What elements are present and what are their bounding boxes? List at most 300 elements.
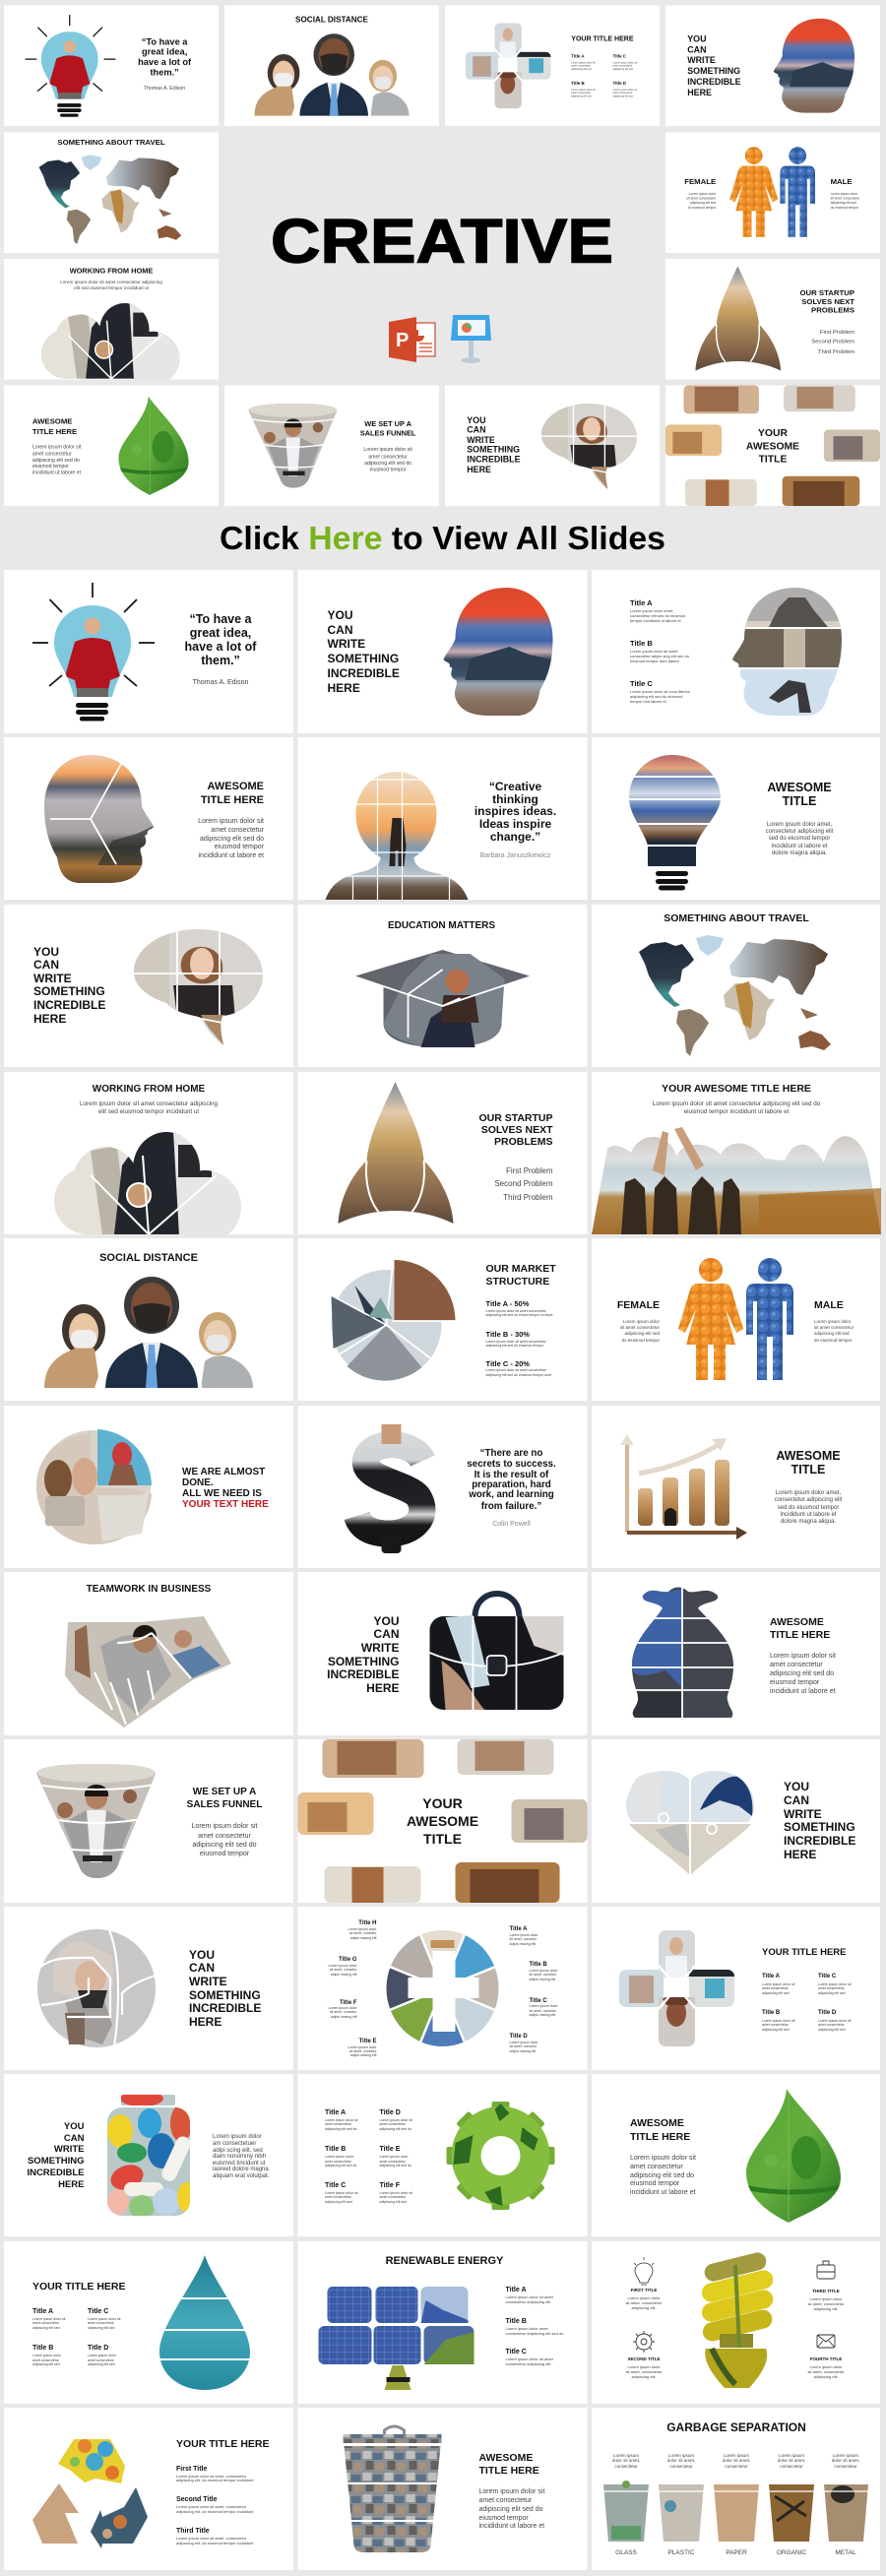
- heading: YOU: [687, 33, 706, 43]
- medical cross photo: [466, 23, 551, 108]
- panel: garbage separation: [592, 2408, 880, 2570]
- heading: YOUR TITLE HERE: [176, 2438, 270, 2450]
- left titles: Title E: [359, 2039, 376, 2044]
- five text columns: consectetur: [725, 2464, 748, 2469]
- money bag photo: [629, 1587, 737, 1720]
- panel: water drop: [4, 2241, 293, 2404]
- handshake photo: [65, 1616, 231, 1728]
- four text items: adipiscing elit sed: [88, 2326, 115, 2330]
- four text items: Title B: [762, 2010, 781, 2016]
- quote: thinking: [492, 792, 538, 806]
- four text items: Title C: [818, 1974, 837, 1979]
- six text items: amet consectetur: [380, 2122, 407, 2126]
- left titles: adipis mssing elit: [350, 1936, 377, 1940]
- three text items: [630, 598, 691, 704]
- heading: HERE: [189, 2015, 222, 2029]
- panel: top thumbnail female male: [665, 132, 880, 253]
- heading: HERE: [58, 2179, 85, 2190]
- three legend items: Lorem ipsum dolor sit amet consectetur: [486, 1340, 547, 1344]
- five text columns: Lorem ipsum: [833, 2453, 858, 2458]
- heading: SOMETHING: [467, 444, 520, 454]
- title: creative: CREATIVE: [271, 207, 613, 276]
- heading: WRITE: [784, 1807, 822, 1821]
- five text columns: dolor sit amet,: [778, 2458, 805, 2463]
- lorem: incididunt ut labore et: [780, 1512, 837, 1518]
- quote: It is the result of: [475, 1470, 549, 1480]
- four text items: adipiscing elit sed: [818, 1991, 846, 1995]
- four text items: amet consectetur: [32, 2358, 60, 2362]
- lorem: incididunt ut labore et: [198, 852, 264, 859]
- heading: INCREDIBLE: [189, 2001, 261, 2015]
- first title: Lorem ipsum dolor: [627, 2295, 661, 2300]
- quote: “To have a: [190, 612, 253, 626]
- heading: SOMETHING: [687, 66, 740, 76]
- three text items: Lorem ipsum dolor sit amet: [506, 2356, 554, 2361]
- male column: MALE: [831, 177, 853, 186]
- quote: preparation, hard: [472, 1479, 551, 1490]
- four text items: adipiscing elit sed: [613, 94, 634, 97]
- three text items: Lorem ipsum dolor sit amet, consectetur: [176, 2536, 247, 2541]
- panel: collage title: [297, 1739, 587, 1903]
- icon: gear outline: [633, 2331, 655, 2353]
- three legend items: Title A - 50%: [486, 1299, 530, 1308]
- problems list: First Problem: [506, 1166, 553, 1175]
- four text items: amet consectetur: [88, 2358, 115, 2362]
- lorem: adipiscing elit sed do: [193, 1842, 257, 1849]
- lorem: Lorem ipsum dolor sit amet consectetur adipiscing: [60, 280, 162, 284]
- panel: top thumbnail quote: [4, 6, 219, 126]
- first title: sit amet, consectetur: [626, 2300, 663, 2305]
- male column: adipiscing elit sed: [831, 201, 856, 205]
- lorem: amet consectetur: [198, 1833, 252, 1840]
- panel: rocket: [297, 1072, 587, 1234]
- three legend items: Title B - 30%: [486, 1330, 530, 1339]
- quote: them.”: [201, 654, 240, 667]
- four text items: Lorem ipsum dolor sit: [762, 1982, 794, 1986]
- rocket photo: [335, 1080, 457, 1225]
- six text items: adipiscing elit sed do: [380, 2164, 411, 2168]
- right titles: adipis mssing elit: [530, 1978, 555, 1981]
- rocket photo: [693, 265, 784, 372]
- four text items: amet consectetur: [762, 2023, 790, 2027]
- quote: have a lot of: [138, 57, 192, 67]
- heading: TEAMWORK IN BUSINESS: [87, 1584, 212, 1595]
- female column: Lorem ipsum dolor: [689, 192, 717, 196]
- six text items: adipiscing elit sed: [380, 2200, 407, 2204]
- lorem: Lorem ipsum dolor sit: [32, 445, 82, 451]
- panel: almost done: [4, 1406, 293, 1568]
- heading: TITLE: [791, 1463, 825, 1476]
- lorem: laoreet dolore magna: [213, 2167, 269, 2172]
- panel: growth chart: [592, 1406, 880, 1568]
- lorem: adipiscing elit sed do: [364, 461, 411, 467]
- lorem: eiusmod tempor: [770, 1679, 820, 1686]
- four text items: amet consectetur: [571, 91, 591, 94]
- lorem: incididunt ut labore et: [478, 2523, 544, 2530]
- third title: THIRD TITLE: [812, 2289, 840, 2293]
- panel: heart: [592, 1739, 880, 1903]
- right titles: adipis mssing elit: [530, 2013, 555, 2017]
- four text items: Title D: [613, 81, 626, 86]
- panel: head puzzle: [4, 737, 293, 900]
- heading: CAN: [467, 424, 485, 434]
- lorem: Lorem ipsum dolor sit: [770, 1653, 836, 1660]
- six text items: amet consectetur: [380, 2195, 407, 2199]
- male column: [814, 1299, 854, 1343]
- left titles: sit amet, consetur: [349, 1931, 377, 1935]
- heading: YOU: [784, 1780, 809, 1793]
- six text items: adipiscing elit sed do: [380, 2127, 411, 2131]
- panel: top thumbnail leaf: [4, 386, 219, 506]
- panel: working from home: [4, 1072, 293, 1236]
- heading: CAN: [374, 1627, 400, 1641]
- four text items: Title B: [571, 81, 585, 86]
- left titles: adipis mssing elit: [331, 1973, 357, 1977]
- heading: YOUR: [758, 428, 789, 439]
- five text columns: consectetur: [780, 2464, 803, 2469]
- left titles: Lorem ipsum dolor: [348, 1927, 377, 1931]
- heading: SOLVES NEXT: [801, 297, 854, 306]
- lorem: amet consectetur: [478, 2497, 533, 2504]
- three text items: Second Title: [176, 2496, 218, 2503]
- four text items: [32, 2308, 120, 2366]
- quote author: Colin Powell: [492, 1521, 531, 1528]
- male column: do eiusmod tempor: [814, 1338, 853, 1343]
- lorem: eiusmod tempor incididunt ut labore et: [684, 1108, 790, 1115]
- leaf photo: [117, 394, 190, 497]
- five text columns: dolor sit amet,: [723, 2458, 750, 2463]
- medical cross photo: [619, 1930, 734, 2046]
- heading: SOMETHING ABOUT TRAVEL: [57, 138, 165, 147]
- lorem: dolore magna aliqua.: [772, 850, 827, 856]
- four text items: amet consectetur: [32, 2321, 60, 2325]
- four text items: adipiscing elit sed: [762, 1991, 790, 1995]
- four text items: adipiscing elit sed: [32, 2326, 60, 2330]
- speech bubble photo: [132, 926, 266, 1049]
- heading: YOUR TITLE HERE: [571, 36, 634, 43]
- lorem: amet consectetur: [32, 451, 72, 457]
- four text items: amet consectetur: [613, 91, 633, 94]
- four text items: Title B: [32, 2345, 53, 2352]
- second title: adipiscing elit.: [631, 2374, 657, 2379]
- lorem: Lorem ipsum dolor sit: [630, 2155, 696, 2162]
- five text columns: consectetur: [834, 2464, 857, 2469]
- panel: market structure: [297, 1238, 587, 1401]
- call to action: Click Here to View All Slides: [220, 520, 665, 556]
- six text items: Lorem ipsum dolor: [380, 2155, 409, 2159]
- three legend items: [486, 1299, 552, 1377]
- first title: FIRST TITLE: [631, 2288, 657, 2293]
- three text items: consectetur adipiscing elit: [506, 2361, 551, 2366]
- four text items: amet consectetur: [818, 1986, 846, 1990]
- heading: HERE: [467, 465, 491, 474]
- heading: YOU: [327, 608, 353, 622]
- left titles: adipis mssing elit: [331, 2015, 357, 2019]
- lorem: amet consectetur: [211, 827, 265, 834]
- four text items: [762, 1974, 851, 2032]
- heading: SOLVES NEXT: [481, 1124, 553, 1136]
- left titles: adipis mssing elit: [350, 2053, 377, 2057]
- icon: light bulb photo: [32, 583, 155, 721]
- heading: INCREDIBLE: [784, 1834, 855, 1848]
- lorem: adipiscing elit sed do: [32, 458, 80, 464]
- first title: [626, 2288, 663, 2310]
- graduation cap photo: [354, 950, 532, 1047]
- three legend items: adipiscing elit sed do eiusmod tempor: [486, 1344, 544, 1348]
- left titles: [329, 1920, 377, 2057]
- right titles: Title B: [530, 1962, 547, 1968]
- panel: renewable energy: [297, 2241, 587, 2404]
- six text items: adipiscing elit sed do: [325, 2164, 357, 2168]
- three text items: eiusmod tempor dunt labore: [630, 659, 680, 663]
- four text items: amet consectetur: [613, 63, 633, 67]
- right titles: Lorem ipsum dolor: [530, 2004, 558, 2008]
- second title: sit amet, consectetur: [626, 2369, 663, 2374]
- head photo: [772, 17, 857, 115]
- two human figures: [729, 147, 815, 237]
- three text items: Title B: [630, 639, 653, 648]
- three legend items: Title C - 20%: [486, 1359, 530, 1368]
- lorem: adipiscing elit sed do: [630, 2172, 694, 2179]
- heading: PROBLEMS: [811, 306, 854, 315]
- quote: them.”: [150, 67, 179, 77]
- panel: top thumbnail collage: [665, 386, 880, 506]
- left titles: Title F: [340, 2000, 357, 2006]
- heading: AWESOME: [767, 781, 832, 794]
- heading: SOMETHING: [328, 1655, 400, 1668]
- five text columns: Lorem ipsum: [613, 2453, 639, 2458]
- lorem: amet consectetur: [368, 454, 408, 460]
- panel: spiral bulb: [592, 2241, 880, 2404]
- right titles: Title D: [510, 2034, 528, 2040]
- heading: INCREDIBLE: [687, 77, 741, 87]
- message: WE ARE ALMOST: [182, 1467, 265, 1477]
- leaf photo: [744, 2086, 843, 2226]
- gear photo: [447, 2102, 555, 2210]
- fourth title: [808, 2356, 845, 2379]
- third title: adipiscing elit.: [813, 2306, 839, 2311]
- female column: do eiusmod tempor: [688, 206, 717, 210]
- lorem: consectetur adipiscing elit: [766, 829, 834, 835]
- three text items: Lorem ipsum dolor sit amet: [506, 2294, 554, 2299]
- icon: lightbulb outline: [634, 2257, 654, 2285]
- right titles: sit amet, consetur: [510, 2044, 538, 2048]
- trash bin photo: [343, 2426, 441, 2552]
- three legend items: Lorem ipsum dolor sit amet consectetur: [486, 1309, 547, 1313]
- heading: CAN: [687, 44, 706, 54]
- heart photo: [626, 1771, 754, 1875]
- six text items: Title F: [380, 2182, 401, 2189]
- three text items: Title C: [506, 2349, 527, 2356]
- lorem: Lorem ipsum dolor sit: [363, 447, 412, 453]
- five text columns: Lorem ipsum: [724, 2453, 749, 2458]
- six text items: Lorem ipsum dolor: [325, 2155, 354, 2159]
- bin labels: METAL: [835, 2549, 856, 2556]
- three text items: Lorem ipsum dolor sit amet, consectetur: [176, 2474, 247, 2479]
- heading: TITLE: [423, 1831, 462, 1847]
- lorem: adipiscing elit sed do: [478, 2506, 543, 2513]
- panel: top thumbnail funnel: [224, 386, 439, 506]
- icon: keynote: [451, 315, 491, 363]
- panel: top thumbnail travel: [4, 132, 219, 253]
- friends landscape photo: [592, 1127, 881, 1234]
- problems list: Second Problem: [811, 340, 854, 346]
- heading: SOMETHING: [28, 2156, 85, 2167]
- lorem: consectetur adipiscing elit: [775, 1497, 843, 1503]
- lorem: eiusmod tempor: [370, 468, 407, 473]
- lorem: Lorem ipsum dolor sit amet consectetur adipiscing elit sed do: [653, 1100, 821, 1107]
- cloud photo: [36, 299, 183, 380]
- funnel photo: [33, 1761, 159, 1881]
- quote: “Creative: [489, 780, 541, 793]
- bin labels: PAPER: [726, 2549, 747, 2556]
- three masked people: [44, 1277, 253, 1388]
- panel: quote bulb: [4, 570, 293, 733]
- third title: [808, 2289, 845, 2311]
- quote author: Thomas A. Edison: [193, 679, 249, 686]
- message: YOUR TEXT HERE: [182, 1499, 269, 1510]
- three text items: Title C: [630, 679, 653, 688]
- heading: YOUR TITLE HERE: [32, 2281, 126, 2293]
- male column: Lorem ipsum dolor: [814, 1319, 852, 1324]
- female column: [684, 177, 717, 210]
- heading: CAN: [327, 623, 352, 637]
- female column: Lorem ipsum dolor: [623, 1319, 661, 1324]
- four text items: Title A: [32, 2308, 53, 2315]
- six text items: [325, 2109, 412, 2204]
- panel: head three sections: [592, 570, 880, 733]
- bin labels: GLASS: [615, 2549, 637, 2556]
- heading: SOMETHING: [784, 1820, 855, 1834]
- speech bubble photo: [539, 402, 639, 492]
- five text columns: dolor sit amet,: [612, 2458, 640, 2463]
- four text items: Lorem ipsum dolor sit: [32, 2317, 65, 2321]
- six text items: amet consectetur: [325, 2195, 352, 2199]
- pie photo: [36, 1429, 152, 1544]
- heading: SOMETHING ABOUT TRAVEL: [664, 912, 809, 924]
- six text items: adipiscing elit sed: [325, 2200, 352, 2204]
- quote: change.”: [490, 830, 540, 844]
- heading: CAN: [189, 1961, 215, 1975]
- world map photo: [39, 155, 181, 244]
- heading: CAN: [33, 958, 59, 972]
- second title: [626, 2356, 663, 2379]
- three text items: consectetur adipiscing elit sed do: [506, 2331, 564, 2336]
- female column: [617, 1299, 661, 1343]
- left titles: Lorem ipsum dolor: [329, 2006, 357, 2010]
- heading: WRITE: [361, 1641, 400, 1655]
- five text columns: consectetur: [614, 2464, 638, 2469]
- quote: from failure.”: [481, 1501, 541, 1512]
- panel: medical cross: [592, 1907, 880, 2070]
- panel: travel: [592, 905, 880, 1067]
- panel: dollar quote: [297, 1406, 587, 1568]
- heading: STRUCTURE: [486, 1276, 549, 1288]
- quote author: Thomas A. Edison: [144, 86, 185, 92]
- brush photo collage: [665, 386, 880, 506]
- lorem: incididunt ut labore et: [32, 471, 82, 476]
- panel: funnel: [4, 1739, 293, 1903]
- six text items: Lorem ipsum dolor sit: [380, 2118, 412, 2122]
- panel: female male: [592, 1238, 880, 1401]
- six text items: Lorem ipsum dolor sit: [380, 2191, 412, 2195]
- fourth title: FOURTH TITLE: [810, 2356, 842, 2361]
- four text items: Lorem ipsum dolor: [32, 2354, 62, 2357]
- four text items: Lorem ipsum dolor: [88, 2354, 117, 2357]
- lorem: aliquam erat volutpat.: [213, 2173, 270, 2179]
- panel: leaf: [592, 2074, 880, 2236]
- six text items: Title A: [325, 2109, 346, 2116]
- lorem: Lorem ipsum dolor: [213, 2134, 262, 2140]
- three text items: Lorem ipsum dolor sit amet, consectetur: [176, 2504, 247, 2509]
- heading: YOUR: [422, 1795, 463, 1811]
- four text items: adipiscing elit sed: [571, 67, 592, 71]
- problems list: Third Problem: [818, 349, 854, 355]
- second title: Lorem ipsum dolor: [627, 2364, 661, 2369]
- heading: AWESOME: [407, 1813, 478, 1829]
- four text items: amet consectetur: [762, 1986, 790, 1990]
- fourth title: adipiscing elit.: [813, 2374, 839, 2379]
- heading: CAN: [784, 1793, 809, 1807]
- four text items: adipiscing elit sed: [88, 2362, 115, 2366]
- icon: powerpoint: P: [396, 330, 409, 351]
- four text items: Lorem ipsum dolor sit: [613, 88, 638, 92]
- three text items: Title B: [506, 2318, 527, 2325]
- heading: TITLE HERE: [201, 794, 264, 806]
- right titles: sit amet, consetur: [510, 1937, 538, 1941]
- quote: “To have a: [142, 36, 188, 46]
- heading: AWESOME: [746, 441, 799, 452]
- four text items: [571, 54, 638, 97]
- second title: SECOND TITLE: [627, 2356, 661, 2361]
- quote: great idea,: [190, 626, 251, 640]
- right titles: sit amet, consetur: [530, 2009, 557, 2013]
- lorem: amet consectetur: [770, 1662, 823, 1668]
- three text items: adipiscing elit, do eiusmod tempor incididunt: [176, 2478, 254, 2482]
- heading: WRITE: [33, 972, 72, 985]
- cloud photo: [48, 1126, 245, 1236]
- four text items: Title D: [818, 2010, 837, 2016]
- panel: top thumbnail social distance: [224, 6, 439, 126]
- lorem: amet consectetur: [630, 2164, 683, 2170]
- four text items: Title C: [88, 2308, 108, 2315]
- panel: trash bin: [297, 2408, 587, 2570]
- female column: adipiscing elit sed: [690, 201, 716, 205]
- quote: “There are no: [480, 1448, 542, 1459]
- three text items: Lorem ipsum dolor amet,: [630, 608, 673, 613]
- lorem: adipi scing elit, sed: [213, 2148, 263, 2154]
- four text items: Lorem ipsum dolor sit: [762, 2019, 794, 2023]
- three text items: adipiscing elit sed do eiusmod: [630, 694, 682, 699]
- six text items: Title C: [325, 2182, 346, 2189]
- heading: SOMETHING: [33, 984, 105, 998]
- heading: YOU: [189, 1948, 215, 1962]
- three legend items: adipiscing elit sed do eimod tempor incidunt: [486, 1313, 552, 1317]
- heading: EDUCATION MATTERS: [388, 920, 495, 931]
- heading: WRITE: [687, 55, 716, 65]
- heading: TITLE: [783, 794, 816, 808]
- right titles: Lorem ipsum dolor: [530, 1969, 558, 1973]
- six text items: Lorem ipsum dolor sit: [325, 2191, 357, 2195]
- three text items: Lorem ipsum dolor amet: [506, 2326, 549, 2331]
- four text items: Lorem ipsum dolor sit: [571, 61, 596, 65]
- five text columns: consectetur: [669, 2464, 693, 2469]
- heading: INCREDIBLE: [33, 998, 105, 1012]
- three masked people: [254, 33, 410, 116]
- water drop photo: [157, 2255, 253, 2390]
- left titles: sit amet, consetur: [349, 2049, 377, 2053]
- right titles: Title A: [510, 1926, 528, 1932]
